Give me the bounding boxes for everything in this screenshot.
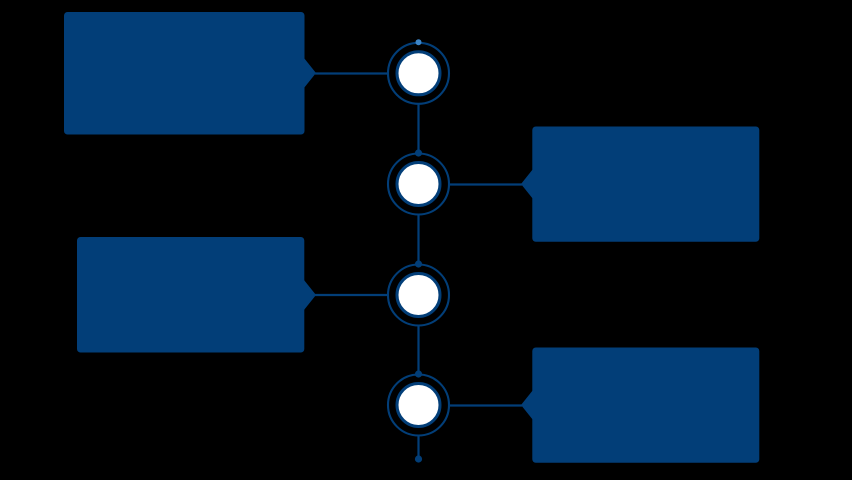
panel: step 4 callout <box>521 348 759 463</box>
panel: step 1 callout <box>64 12 316 134</box>
vertical spine <box>417 103 420 459</box>
node: step 4 <box>388 370 449 436</box>
node: step 3 <box>388 260 449 326</box>
connector: step 4 <box>449 404 522 407</box>
connector: step 1 <box>315 72 388 75</box>
node: step 2 <box>388 149 449 214</box>
panel: step 2 callout <box>521 126 759 242</box>
end dot <box>415 455 422 463</box>
panel: step 3 callout <box>77 237 316 352</box>
node: step 1 <box>388 39 449 104</box>
connector: step 3 <box>315 294 388 296</box>
connector: step 2 <box>449 183 522 186</box>
